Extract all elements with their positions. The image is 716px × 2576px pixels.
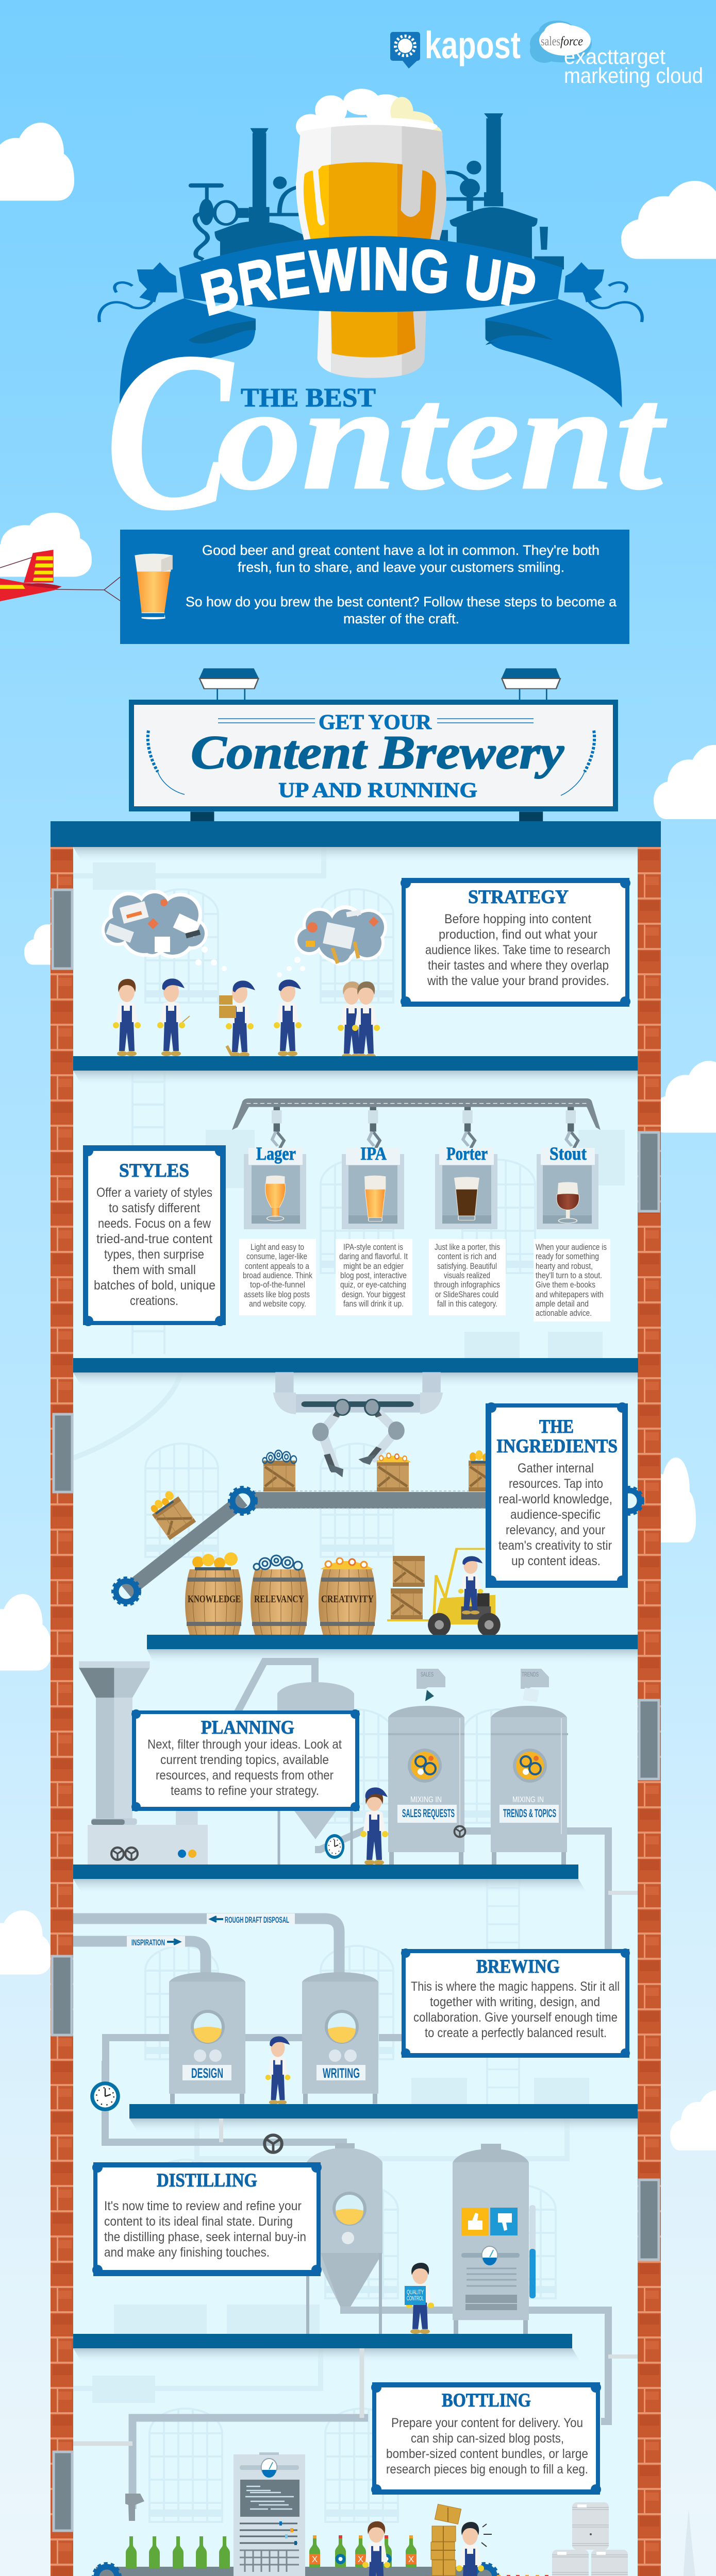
body text: research pieces big enough to fill a keg.: [386, 2462, 588, 2477]
panel: ingredients box: [486, 1402, 628, 1588]
worker: quality control: [405, 2263, 434, 2334]
lager description: content appeals to a: [245, 1261, 309, 1271]
panel: intro: [120, 530, 629, 644]
heading: THE: [539, 1416, 574, 1437]
kapost wordmark: kapost: [425, 24, 521, 66]
body text: teams to refine your strategy.: [171, 1784, 319, 1798]
body text: [104, 2199, 306, 2260]
roof: [51, 821, 661, 847]
section: strategy: [102, 878, 630, 1059]
exacttarget wordmark: exacttarget: [564, 44, 665, 69]
icon: thumbs up: [461, 2208, 489, 2235]
worker: quality control: CONTROL: [407, 2295, 424, 2302]
section: distribution: [0, 2575, 624, 2576]
barrels: CREATIVITY: [321, 1594, 374, 1605]
lager description: assets like blog posts: [244, 1290, 310, 1299]
control machine: [234, 2452, 305, 2576]
worker: [360, 1787, 388, 1865]
body text: batches of bold, unique: [94, 1278, 215, 1293]
sign heading: up and running: UP AND RUNNING: [278, 778, 477, 802]
body text: content to its ideal final state. During: [104, 2214, 293, 2229]
lager description: [239, 1239, 316, 1315]
intro text: Good beer and great content have a lot in common. They're both: [202, 543, 600, 558]
tank caption: MIXING IN: [410, 1795, 442, 1804]
stout description: actionable advice.: [536, 1308, 592, 1318]
funnel machine: [79, 1662, 208, 1865]
hop ornaments: [99, 262, 642, 322]
floor 3: [147, 1635, 638, 1649]
planning tank and pipes: [237, 1662, 638, 1953]
body text: them with small: [113, 1263, 196, 1277]
body text: and make any finishing touches.: [104, 2245, 270, 2260]
icon: thumbs down: [490, 2208, 518, 2235]
stout description: When your audience is: [536, 1242, 607, 1252]
tank: writing: [302, 1972, 378, 2104]
hoppers: SALES: [421, 1671, 434, 1678]
body text: current trending topics, available: [160, 1753, 329, 1767]
heading: BREWING: [476, 1956, 560, 1977]
porter description: through infographics: [434, 1280, 500, 1290]
stout description: Give them e-books: [536, 1280, 595, 1290]
hoppers: TRENDS: [522, 1671, 539, 1678]
clock: [90, 2081, 120, 2111]
intro text: [186, 543, 617, 626]
body text: [147, 1737, 342, 1798]
pipes: [73, 1919, 407, 2142]
body text: Offer a variety of styles: [96, 1185, 212, 1200]
panel: brewing box: [401, 1948, 630, 2058]
wall slits: [52, 890, 659, 2576]
interior pale backdrop: [73, 847, 625, 2576]
ipa description: might be an edgier: [343, 1261, 404, 1271]
body text: audience-specific: [510, 1507, 601, 1522]
foam: [296, 89, 442, 145]
brewery silhouette: [189, 113, 564, 269]
body text: Gather internal: [518, 1461, 594, 1476]
body text: resources. Tap into: [509, 1477, 603, 1491]
panel: strategy box: [401, 878, 630, 1007]
beer panels: [244, 1143, 598, 1229]
body text: with the value your brand provides.: [427, 974, 609, 988]
porter description: content is rich and: [438, 1251, 496, 1261]
overhead rail: [232, 1098, 601, 1148]
porter description: Just like a porter, this: [435, 1242, 500, 1252]
panel: ipa: [342, 1143, 404, 1229]
building: [51, 821, 661, 2576]
ipa description: [336, 1239, 412, 1315]
stout description: and whitepapers with: [536, 1290, 604, 1299]
body text: types, then surprise: [104, 1247, 204, 1262]
ipa description: quiz, or eye-catching: [340, 1280, 406, 1290]
heading: BOTTLING: [442, 2390, 531, 2411]
body text: to satisfy different: [109, 1201, 200, 1215]
intro text: So how do you brew the best content? Follow these steps to become a: [186, 594, 617, 609]
porter description: fall in this category.: [437, 1299, 497, 1309]
floor shadows: [73, 847, 638, 2576]
ipa description: blog post, interactive: [340, 1270, 407, 1280]
barrel labels: KNOWLEDGE: [188, 1594, 241, 1605]
body text: their tastes and where they overlap: [428, 958, 609, 973]
tank caption: MIXING IN: [512, 1795, 544, 1804]
marketing cloud wordmark: marketing cloud: [564, 63, 703, 88]
beer: [303, 162, 436, 358]
filling nozzle: [125, 2494, 144, 2521]
pipe label: rough draft disposal: ROUGH DRAFT DISPOSAL: [225, 1915, 289, 1925]
panel: planning box: [131, 1709, 360, 1811]
tank: trends and topics: [491, 1706, 568, 1865]
panel: distilling box: [92, 2162, 322, 2276]
brick walls: [51, 847, 73, 2576]
sign heading: content brewery: Content Brewery: [191, 726, 564, 778]
hoppers: [417, 1669, 549, 1702]
body text: relevancy, and your: [506, 1523, 605, 1537]
body text: resources, and requests from other: [156, 1768, 334, 1783]
worker with clipboard: [362, 2521, 390, 2576]
ipa description: design. Your biggest: [342, 1290, 405, 1299]
wheat ornaments: [148, 731, 594, 795]
beer glass: [292, 89, 452, 381]
thought bubble with ideas: [102, 890, 305, 977]
stout description: hearty and robust,: [536, 1261, 593, 1271]
body text: [411, 1979, 620, 2040]
floor 2: [73, 1358, 638, 1372]
pipe label: rough draft disposal: [207, 1913, 295, 1925]
planning tank: [277, 1682, 354, 1865]
floor 5: [129, 2104, 638, 2119]
body text: [498, 1461, 612, 1568]
lager description: consume, lager-like: [246, 1251, 307, 1261]
body text: [94, 1185, 215, 1308]
body text: tried-and-true content: [96, 1232, 212, 1246]
panel: porter: [435, 1143, 497, 1229]
bottles: [126, 2535, 417, 2568]
tank: writing: WRITING: [323, 2065, 360, 2081]
heading: [496, 1416, 618, 1457]
stout description: ample detail and: [536, 1299, 589, 1309]
panel: porter: Porter: [446, 1143, 488, 1164]
section: bottling: [73, 2348, 628, 2576]
heading: STYLES: [119, 1160, 189, 1181]
panel: styles box: [83, 1145, 226, 1326]
body text: creations.: [130, 1294, 178, 1308]
tank: design: [169, 1972, 245, 2104]
panel: lager: [244, 1143, 306, 1229]
airplane: [0, 550, 120, 601]
tank: sales requests: SALES REQUESTS: [402, 1807, 455, 1820]
ipa description: fans will drink it up.: [343, 1299, 404, 1309]
tank: design: DESIGN: [191, 2065, 223, 2081]
panel: lager: Lager: [256, 1143, 296, 1164]
body text: team's creativity to stir: [498, 1538, 612, 1553]
left distilling tank: [307, 2143, 382, 2334]
section: brewing: [73, 1913, 630, 2142]
lager description: broad audience. Think: [243, 1270, 312, 1280]
body text: production, find out what your: [439, 927, 597, 942]
body text: It's now time to review and refine your: [104, 2199, 302, 2213]
panel: stout: [537, 1143, 598, 1229]
floor 4: [73, 1865, 578, 1879]
body text: bomber-sized content bundles, or large: [386, 2447, 588, 2461]
panel: ipa: IPA: [360, 1143, 387, 1164]
barrels: RELEVANCY: [254, 1594, 304, 1605]
pipes: [221, 2119, 638, 2421]
kegs: [552, 2502, 628, 2576]
bottling conveyor: [93, 2564, 498, 2576]
overhead duct and robot arms: [273, 1372, 443, 1477]
porter description: [429, 1239, 506, 1315]
ipa description: IPA-style content is: [343, 1242, 403, 1252]
pipe label: inspiration: INSPIRATION: [131, 1938, 165, 1947]
body text: [425, 912, 610, 988]
panel: bottling box: [371, 2382, 601, 2495]
body text: This is where the magic happens. Stir it all: [411, 1979, 620, 1994]
porter description: satisfying. Beautiful: [437, 1261, 497, 1271]
forklift: [387, 1549, 501, 1637]
lager description: and website copy.: [249, 1299, 306, 1309]
body text: together with writing, design, and: [430, 1995, 600, 2009]
panel: stout: Stout: [550, 1143, 587, 1164]
title: the best: THE BEST: [241, 383, 376, 413]
section: planning: [79, 1662, 638, 1953]
title: content: [106, 306, 668, 557]
title: brewing up: BREWING UP: [201, 247, 535, 316]
icon: kapost: [390, 32, 420, 69]
intro text: fresh, fun to share, and leave your customers smiling.: [238, 560, 564, 575]
thought bubble with laptop: [294, 905, 387, 965]
workers: [113, 978, 380, 1059]
ipa description: daring and flavorful. It: [339, 1251, 408, 1261]
title: content: C: [106, 306, 236, 557]
icon: beer glass: [135, 554, 173, 619]
worker: [265, 2036, 290, 2105]
body text: Before hopping into content: [444, 912, 591, 926]
body text: needs. Focus on a few: [98, 1216, 211, 1231]
heading: DISTILLING: [157, 2170, 257, 2191]
carried boxes: [219, 995, 236, 1018]
heading: STRATEGY: [468, 887, 569, 908]
body text: can ship can-sized blog posts,: [411, 2431, 564, 2446]
surprised worker: [456, 2522, 492, 2576]
barrels: [185, 1552, 376, 1635]
salesforce cloud: [530, 21, 592, 63]
porter description: or SlideShares could: [435, 1290, 498, 1299]
floor 1: [73, 1056, 638, 1071]
body text: Prepare your content for delivery. You: [391, 2416, 583, 2430]
crates on conveyor: [146, 1449, 501, 1540]
title: content: ontent: [217, 355, 668, 520]
section: distilling: [92, 2119, 638, 2421]
header logos: [390, 21, 703, 88]
stout description: ready for something: [536, 1251, 599, 1261]
intro text: master of the craft.: [343, 611, 459, 626]
title ribbon: [120, 236, 622, 408]
body text: up content ideas.: [511, 1554, 601, 1568]
tank: trends and topics: TRENDS & TOPICS: [503, 1807, 556, 1820]
stout description: [534, 1239, 610, 1321]
elevator bottles: [493, 2575, 553, 2576]
distant city skyline: [0, 2509, 716, 2576]
sign heading: get your: GET YOUR: [319, 710, 431, 734]
stout description: they'll turn to a stout.: [536, 1270, 602, 1280]
body text: to create a perfectly balanced result.: [425, 2026, 607, 2040]
pipes: [73, 2348, 368, 2509]
conveyor belts: [113, 1487, 643, 1605]
section: styles: [83, 1098, 610, 1326]
body text: audience likes. Take time to research: [425, 943, 610, 957]
section: ingredients: [113, 1372, 643, 1637]
billboard: [129, 668, 618, 821]
body text: [386, 2416, 588, 2477]
body text: real-world knowledge,: [498, 1492, 612, 1506]
body text: Next, filter through your ideas. Look at: [147, 1737, 342, 1752]
heading: INGREDIENTS: [496, 1436, 618, 1457]
box stack on hand cart: [425, 2504, 462, 2576]
clouds: [0, 123, 716, 2150]
worker: quality control: QUALITY: [407, 2289, 424, 2296]
right distilling tank: [453, 2144, 536, 2334]
floor 6: [73, 2334, 572, 2348]
body text: the distilling phase, seek internal buy-in: [104, 2230, 306, 2244]
porter description: visuals realized: [444, 1270, 490, 1280]
lager description: top-of-the-funnel: [250, 1280, 305, 1290]
heading: PLANNING: [201, 1717, 294, 1738]
tank: sales requests: [388, 1706, 465, 1865]
lager description: Light and easy to: [251, 1242, 304, 1252]
body text: collaboration. Give yourself enough time: [413, 2010, 618, 2025]
